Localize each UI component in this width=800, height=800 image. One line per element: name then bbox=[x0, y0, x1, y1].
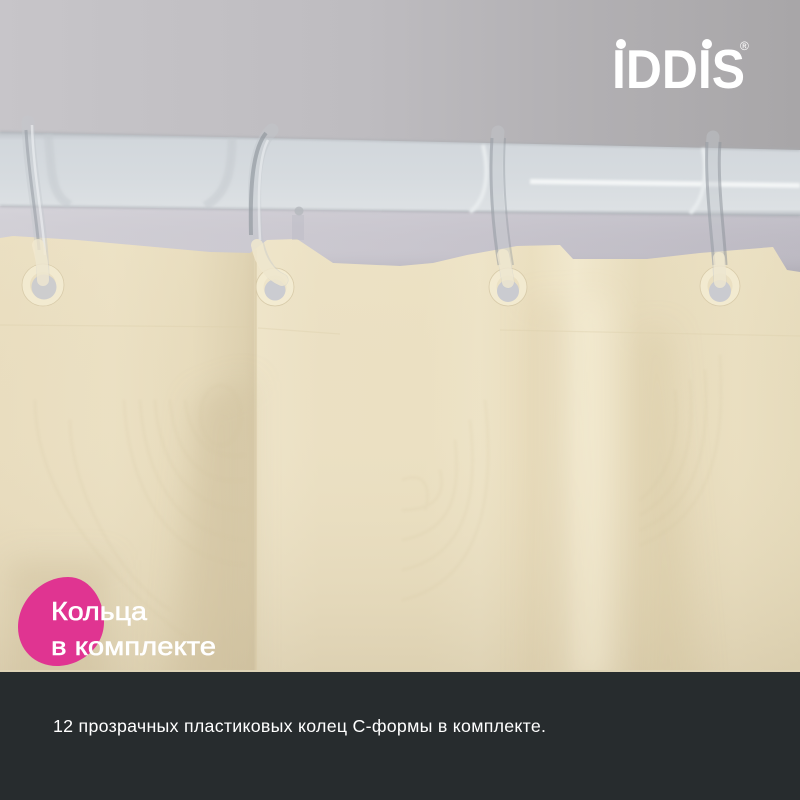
shower rod bbox=[0, 132, 800, 216]
logo registered mark: ® bbox=[740, 39, 749, 53]
ring 1 with eyelet bbox=[22, 122, 64, 306]
ring 4 with eyelet bbox=[700, 137, 740, 306]
pink blob bbox=[18, 577, 104, 666]
vertical seam bbox=[255, 250, 257, 672]
fold shadows bbox=[12, 373, 674, 670]
logo wordmark: IDDIS bbox=[612, 38, 745, 100]
curtain bbox=[0, 230, 800, 700]
heading bbox=[51, 596, 216, 661]
description text: 12 прозрачных пластиковых колец С-формы в комплекте. bbox=[53, 716, 546, 736]
heading line one: Кольца bbox=[51, 596, 148, 626]
logo dot two bbox=[702, 39, 712, 49]
moire circles bbox=[35, 355, 721, 640]
ring 2 with eyelet bbox=[251, 130, 304, 306]
background wall bbox=[0, 0, 800, 280]
ring 3 with eyelet bbox=[489, 132, 527, 306]
bottom band bbox=[0, 672, 800, 800]
curtain hem bbox=[0, 325, 800, 336]
logo: IDDIS bbox=[612, 38, 749, 100]
logo dot one bbox=[616, 39, 626, 49]
heading line two: в комплекте bbox=[51, 631, 216, 661]
bottom edge bbox=[0, 670, 800, 672]
